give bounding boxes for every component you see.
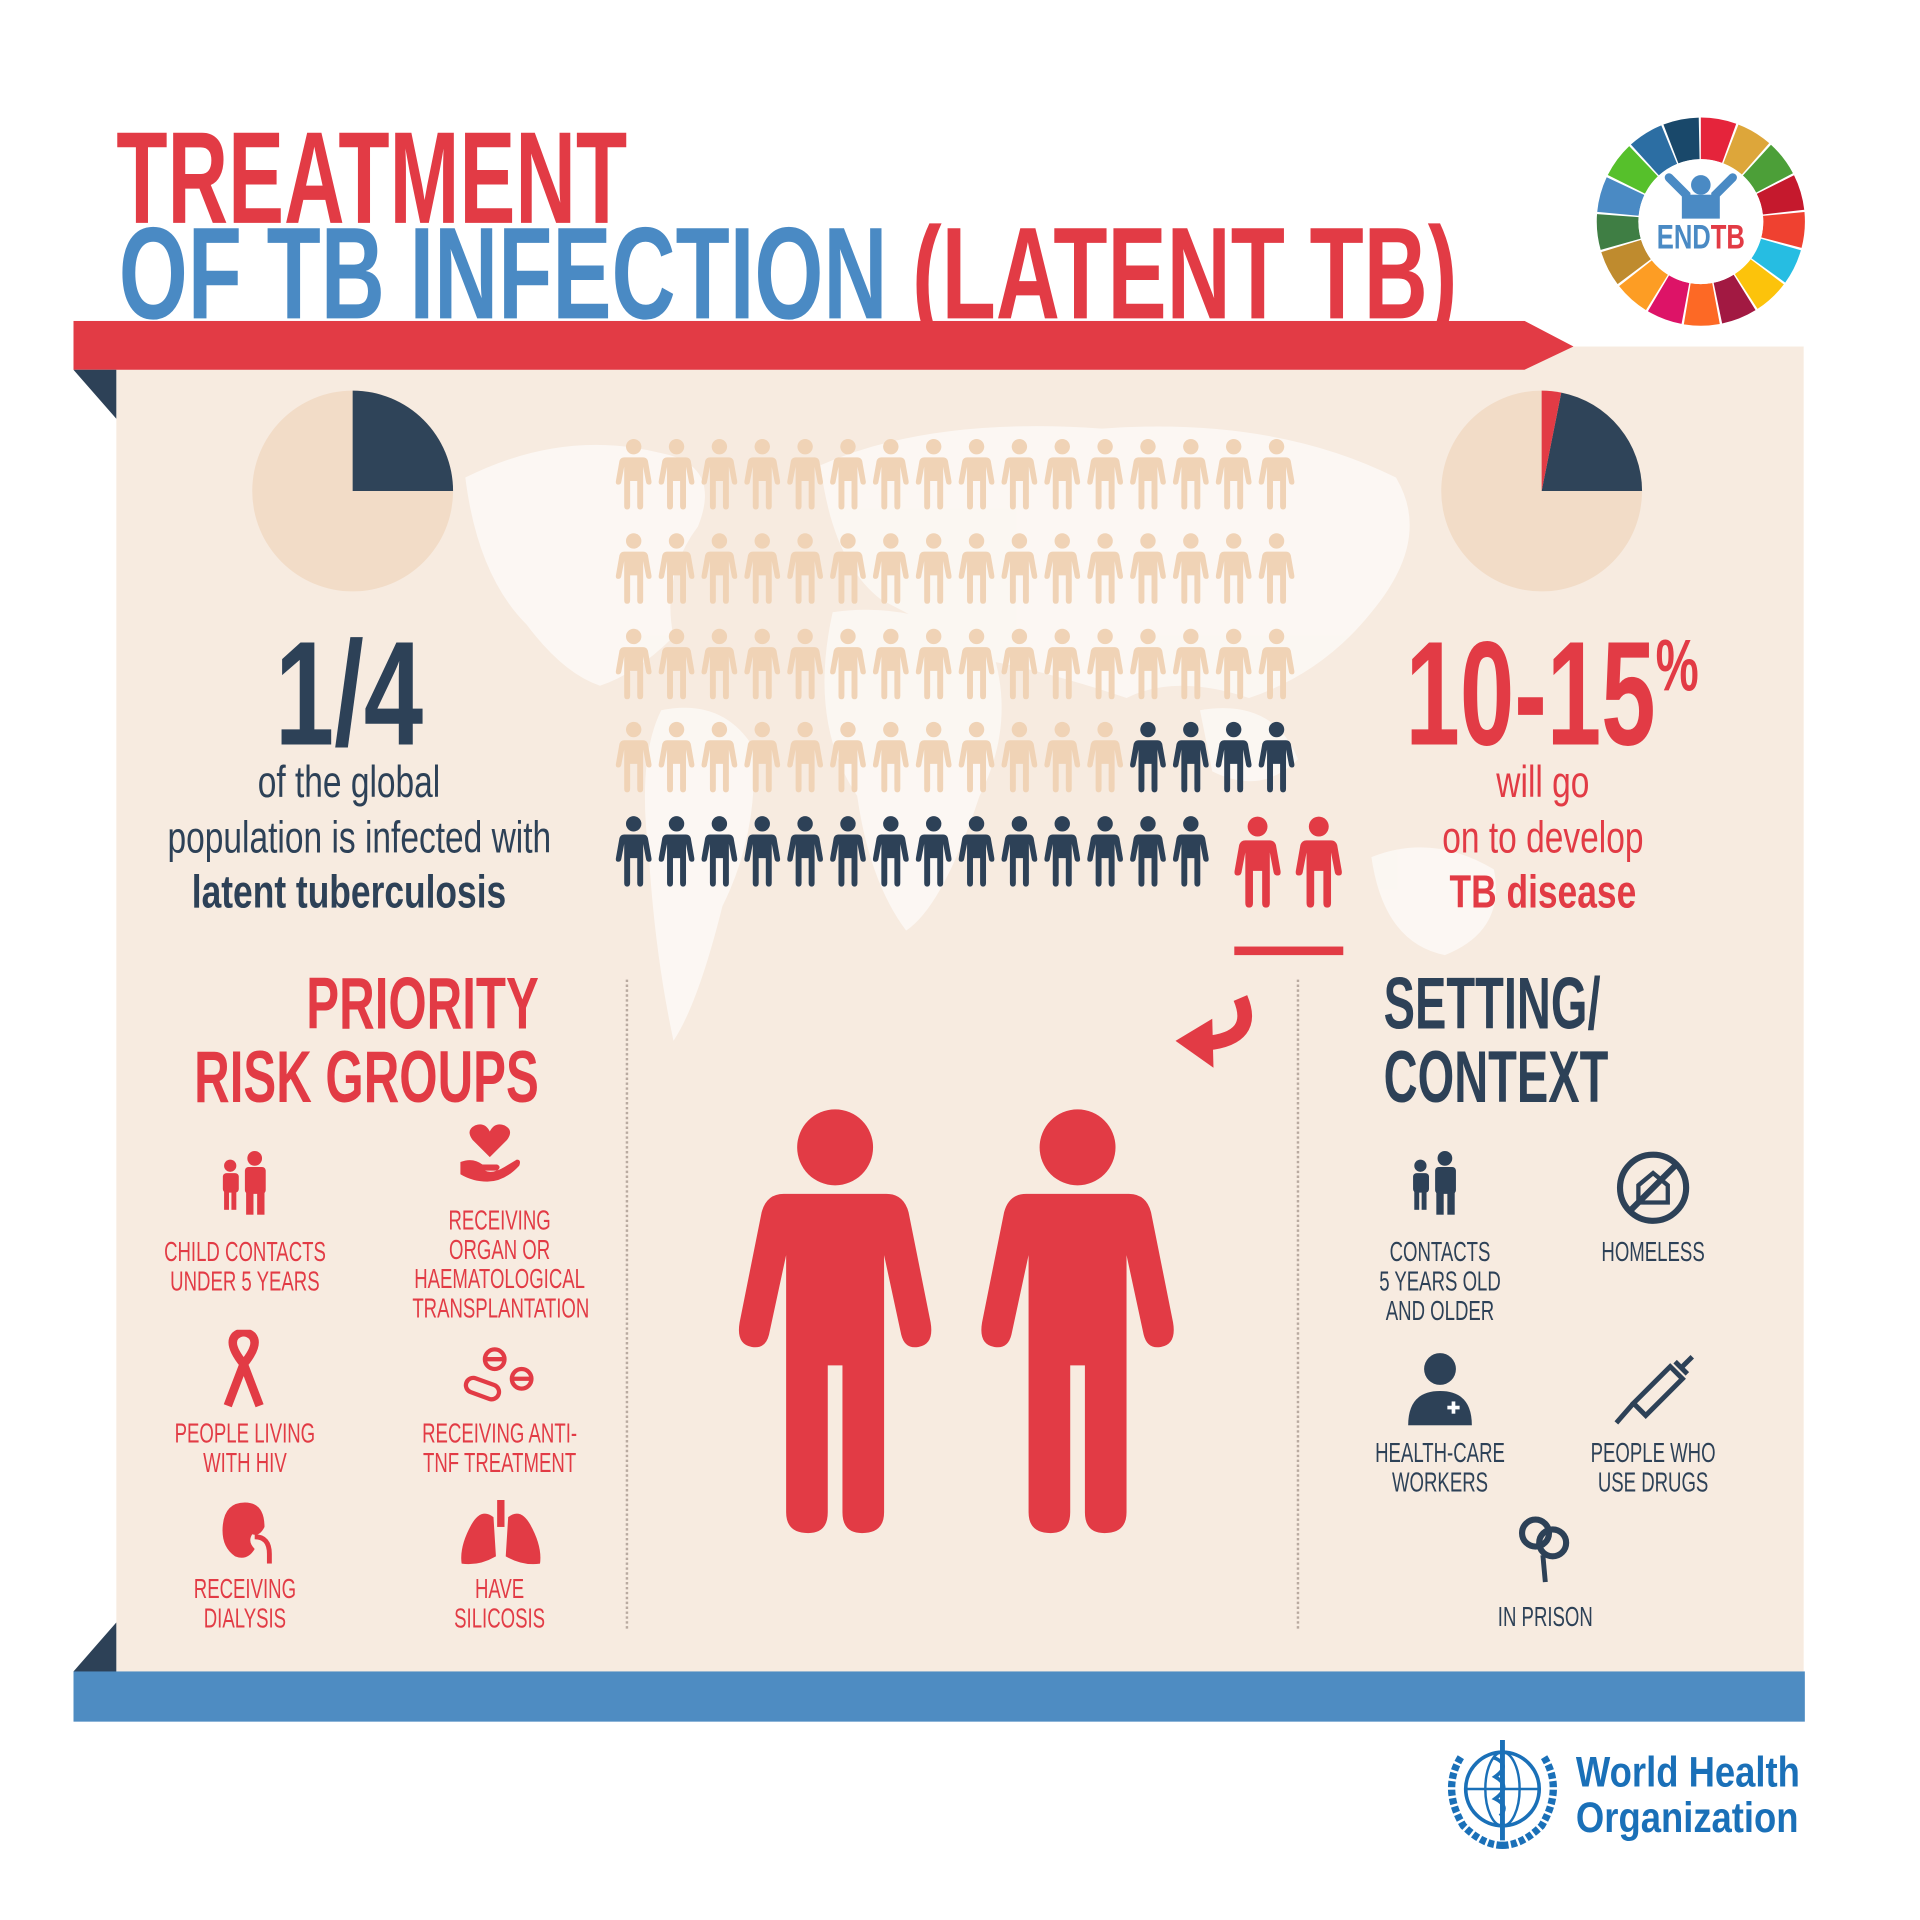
arrow: curved bbox=[1176, 995, 1252, 1068]
label: contacts 5 years: AND OLDER bbox=[1386, 1294, 1494, 1326]
people grid bbox=[616, 439, 1344, 956]
label: health-care workers: HEALTH-CARE bbox=[1375, 1436, 1505, 1468]
label: in prison: IN PRISON bbox=[1498, 1600, 1593, 1632]
label: homeless: HOMELESS bbox=[1601, 1236, 1705, 1267]
label: people who use drugs: PEOPLE WHO bbox=[1591, 1436, 1716, 1468]
divider lines bbox=[626, 980, 628, 1629]
label: contacts 5 years bbox=[1379, 1236, 1501, 1326]
icon: contacts family bbox=[1413, 1151, 1456, 1215]
blue footer band bbox=[74, 1622, 1805, 1722]
stat: 10-15%: on to develop bbox=[1442, 812, 1643, 862]
label: anti-TNF bbox=[422, 1417, 577, 1478]
title bbox=[116, 104, 1457, 347]
WHO logo: World Health bbox=[1576, 1749, 1800, 1796]
label: contacts 5 years: CONTACTS bbox=[1390, 1236, 1490, 1267]
icon: homeless bbox=[1616, 1152, 1690, 1224]
stat: 1/4: population is infected with bbox=[168, 812, 551, 862]
pie chart: 10-15% bbox=[1441, 390, 1642, 592]
label: child contacts bbox=[164, 1236, 326, 1297]
icon: heart in hand bbox=[460, 1124, 520, 1182]
heading: setting/context: CONTEXT bbox=[1384, 1036, 1608, 1118]
label: HIV bbox=[175, 1417, 315, 1478]
heading: setting/context bbox=[1384, 962, 1608, 1118]
icon: ribbon bbox=[224, 1330, 264, 1408]
label: contacts 5 years: 5 YEARS OLD bbox=[1379, 1265, 1501, 1297]
pie chart: 1/4 bbox=[252, 390, 454, 592]
big red people bbox=[738, 1109, 1174, 1534]
label: organ transplantation bbox=[412, 1204, 589, 1324]
icon: kidney bbox=[222, 1502, 272, 1564]
icon: child contacts bbox=[222, 1151, 266, 1215]
label: anti-TNF: TNF TREATMENT bbox=[423, 1446, 576, 1478]
label: child contacts: UNDER 5 YEARS bbox=[170, 1265, 320, 1297]
world map bbox=[466, 426, 1496, 1040]
logo: END TB bbox=[1596, 118, 1805, 326]
label: health-care workers: WORKERS bbox=[1392, 1466, 1488, 1498]
icon: pills bbox=[464, 1347, 534, 1402]
stat: 1/4: 1/4 bbox=[275, 610, 423, 776]
heading: setting/context: SETTING/ bbox=[1384, 962, 1601, 1044]
title: TREATMENT bbox=[116, 104, 627, 251]
WHO logo: Organization bbox=[1576, 1794, 1799, 1842]
stat: 10-15% bbox=[1405, 610, 1699, 918]
label: child contacts: CHILD CONTACTS bbox=[164, 1236, 326, 1267]
logo: END TB: ENDTB bbox=[1657, 219, 1745, 257]
icon: lungs bbox=[461, 1500, 540, 1564]
label: silicosis: SILICOSIS bbox=[454, 1602, 545, 1633]
label: organ transplantation: ORGAN OR bbox=[449, 1233, 550, 1265]
icon: handcuffs bbox=[1519, 1516, 1570, 1582]
label: dialysis: DIALYSIS bbox=[204, 1602, 286, 1633]
background panel bbox=[116, 347, 1804, 1671]
heading: priority risk groups: PRIORITY bbox=[306, 962, 539, 1044]
heading: priority risk groups: RISK GROUPS bbox=[194, 1036, 539, 1118]
stat: 10-15%: will go bbox=[1496, 757, 1589, 807]
label: dialysis bbox=[194, 1572, 296, 1633]
icon: health-care worker bbox=[1408, 1353, 1472, 1426]
title: OF TB INFECTION (LATENT TB) bbox=[119, 200, 1457, 347]
label: silicosis: HAVE bbox=[475, 1572, 524, 1604]
label: people who use drugs: USE DRUGS bbox=[1598, 1466, 1708, 1498]
label: organ transplantation: HAEMATOLOGICAL bbox=[414, 1262, 585, 1294]
stat: 1/4: of the global bbox=[258, 757, 440, 807]
label: anti-TNF: RECEIVING ANTI- bbox=[422, 1417, 577, 1449]
red banner arrow bbox=[74, 320, 1574, 419]
label: HIV: WITH HIV bbox=[203, 1446, 287, 1478]
stat: 1/4 bbox=[168, 610, 551, 918]
label: dialysis: RECEIVING bbox=[194, 1572, 296, 1604]
stat: 10-15%: TB disease bbox=[1450, 867, 1636, 918]
stat: 1/4: latent tuberculosis bbox=[192, 867, 506, 918]
label: organ transplantation: TRANSPLANTATION bbox=[412, 1292, 589, 1324]
heading: priority risk groups bbox=[194, 962, 539, 1118]
label: people who use drugs bbox=[1591, 1436, 1716, 1498]
label: organ transplantation: RECEIVING bbox=[448, 1204, 551, 1236]
label: health-care workers bbox=[1375, 1436, 1505, 1498]
label: silicosis bbox=[454, 1572, 545, 1633]
icon: syringe bbox=[1614, 1355, 1694, 1424]
stat: 10-15%: 10-15% bbox=[1405, 610, 1699, 776]
WHO logo bbox=[1448, 1740, 1800, 1849]
label: HIV: PEOPLE LIVING bbox=[175, 1417, 315, 1449]
